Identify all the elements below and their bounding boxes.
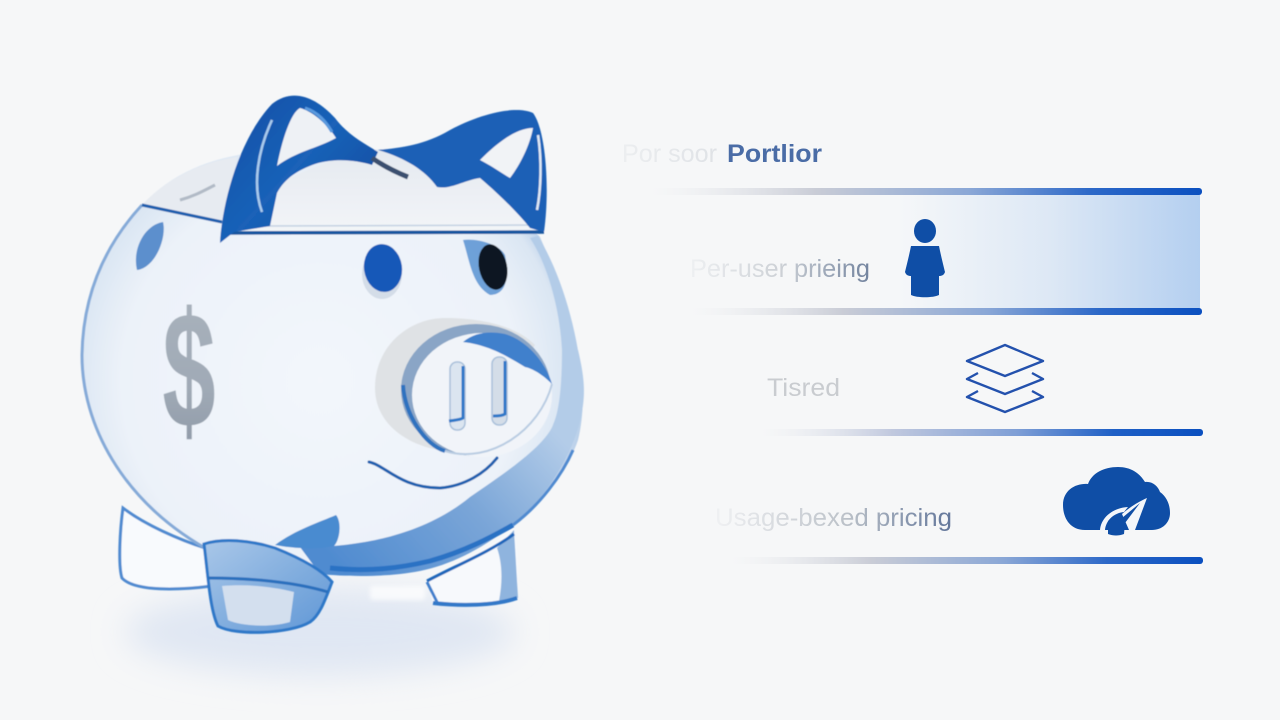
front foot ridge xyxy=(208,578,328,592)
left fin smear xyxy=(136,222,164,270)
front foot lower window xyxy=(222,585,294,626)
body left edge outline xyxy=(82,205,205,548)
rim lines xyxy=(222,232,544,233)
panel: pricing rows xyxy=(622,140,1203,564)
divider bar 3 xyxy=(760,429,1203,436)
heading: faded label: Por soor xyxy=(622,140,717,168)
snout lower right edge xyxy=(445,384,552,454)
head top glass xyxy=(222,149,545,232)
snout blue reflection xyxy=(463,333,552,384)
snout ring xyxy=(401,324,551,456)
label: per-user pricing: Per-user prieing xyxy=(690,255,870,283)
icon: cloud with gauge xyxy=(1063,467,1170,536)
right eye socket xyxy=(463,240,507,295)
right ear inner opening xyxy=(480,128,533,178)
back right leg xyxy=(427,528,518,606)
right eye xyxy=(475,242,511,292)
snout lower-left arc xyxy=(403,385,445,451)
illustration: glass piggy bank xyxy=(82,96,584,632)
front foot xyxy=(204,541,332,632)
snout face xyxy=(412,333,552,457)
gauge hub and pointer xyxy=(1108,503,1140,536)
mouth xyxy=(369,458,497,488)
divider bar 1 xyxy=(650,188,1202,195)
right ear light strip xyxy=(537,135,541,210)
snout outer grey crescent xyxy=(375,318,535,452)
left ear inner opening xyxy=(277,108,336,166)
ear fold dark smear xyxy=(372,158,408,177)
right ear xyxy=(378,110,547,232)
left eye xyxy=(361,242,405,294)
divider bar 2 xyxy=(690,308,1202,315)
icon: stacked layers xyxy=(967,345,1043,412)
back right leg upper edge xyxy=(427,534,514,581)
shoulder grey streak xyxy=(180,185,215,200)
left ear limb highlights xyxy=(257,120,272,212)
nostril left xyxy=(449,362,465,430)
belly smear xyxy=(275,515,340,548)
body bottom right glass band xyxy=(300,350,584,576)
panel: highlight background xyxy=(880,194,1200,310)
gauge arc xyxy=(1100,507,1128,530)
right outer edge line xyxy=(513,450,573,525)
dollar sign: $ xyxy=(162,278,216,462)
label: usage-based pricing: Usage-bexed pricing xyxy=(715,504,952,532)
left eye lower crescent xyxy=(362,249,402,299)
heading: portion label: Portlior xyxy=(727,140,822,168)
white gap under belly xyxy=(370,586,425,600)
label: tiered: Tisred xyxy=(767,374,840,402)
rim shoulder line xyxy=(142,205,222,222)
piggy body xyxy=(82,150,583,573)
body right upper glass edge xyxy=(530,236,583,425)
divider bar 4 xyxy=(730,557,1203,564)
icon: person xyxy=(905,219,945,297)
left ear xyxy=(220,96,378,243)
gauge needle xyxy=(1122,498,1147,530)
left shoulder top glass xyxy=(142,157,237,222)
nostril right xyxy=(492,357,507,425)
lower rim dark stripe xyxy=(330,525,513,570)
back left leg xyxy=(120,508,212,589)
floor reflection under piggy bank xyxy=(125,588,515,676)
